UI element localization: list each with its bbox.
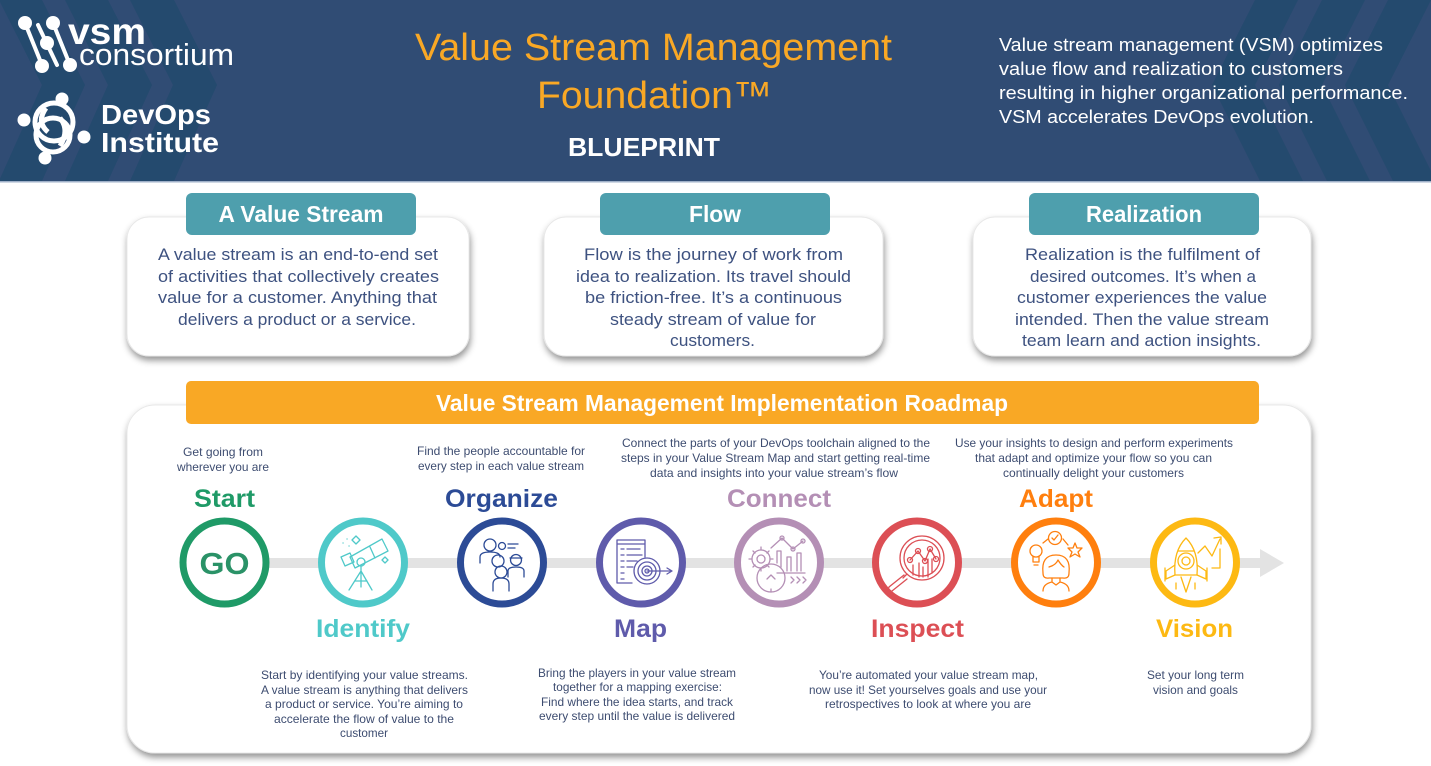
panel: realization: customer experiences the value xyxy=(1017,288,1267,307)
panel: flow: idea to realization. Its travel should xyxy=(576,267,851,286)
step: organize: Find the people accountable for xyxy=(417,445,585,458)
step: organize xyxy=(417,445,585,604)
step: identify: Identify xyxy=(316,615,410,643)
step: vision: vision and goals xyxy=(1153,684,1238,697)
panel: roadmap xyxy=(127,381,1311,753)
step: connect: data and insights into your value stream’s flow xyxy=(650,467,899,480)
step: organize: Organize xyxy=(445,485,558,513)
step: inspect: You’re automated your value stream map, xyxy=(819,669,1038,682)
logo: VSM Consortium: vsm xyxy=(68,11,146,52)
step: vision xyxy=(1147,521,1244,697)
step: vision: Set your long term xyxy=(1147,669,1244,682)
step: connect: Connect the parts of your DevOps toolchain aligned to the xyxy=(622,437,930,450)
step: inspect: now use it! Set yourselves goals and use your xyxy=(809,684,1047,697)
panel: realization: intended. Then the value stream xyxy=(1015,310,1269,329)
step: inspect: retrospectives to look at where you are xyxy=(825,698,1031,711)
panel: flow xyxy=(544,193,883,356)
step: map: Map xyxy=(614,615,667,643)
step: adapt: continually delight your customers xyxy=(1003,467,1184,480)
step: identify: a product or service. You’re aiming to xyxy=(265,698,463,711)
step: identify xyxy=(261,521,468,740)
panel: realization: team learn and action insights. xyxy=(1022,331,1261,350)
step: identify: Start by identifying your value streams. xyxy=(261,669,468,682)
header banner xyxy=(0,0,1431,182)
title xyxy=(415,27,892,117)
panel: flow: steady stream of value for xyxy=(610,310,817,329)
step: start: Get going from xyxy=(183,446,263,459)
panel: flow: customers. xyxy=(670,331,755,350)
icon: person with ideas xyxy=(1030,532,1082,591)
step: adapt: that adapt and optimize your flow so you can xyxy=(975,452,1212,465)
step: inspect: Inspect xyxy=(871,615,965,643)
icon: checklist and target xyxy=(617,540,672,584)
panel: realization: desired outcomes. It’s when a xyxy=(1030,267,1257,286)
panel: a value stream: delivers a product or a service. xyxy=(178,310,416,329)
step: start: wherever you are xyxy=(176,461,269,474)
step: connect xyxy=(621,437,930,604)
icon: rocket and growth chart xyxy=(1165,537,1221,592)
logo: DevOps Institute: Institute xyxy=(101,127,219,158)
step: vision: Vision xyxy=(1156,615,1233,643)
step: start: GO xyxy=(200,546,250,581)
panel: flow: Flow is the journey of work from xyxy=(584,245,843,264)
panel: flow: be friction-free. It’s a continuous xyxy=(585,288,842,307)
step: map xyxy=(538,521,736,723)
step: identify: A value stream is anything that delivers xyxy=(261,684,468,697)
logo: VSM Consortium: consortium xyxy=(79,37,234,72)
header description: Value stream management (VSM) optimizes xyxy=(999,34,1383,55)
logo: DevOps Institute: DevOps xyxy=(101,99,211,130)
roadmap heading xyxy=(186,381,1259,424)
step: adapt: Use your insights to design and perform experiments xyxy=(955,437,1233,450)
header description xyxy=(999,34,1408,127)
step: map: Find where the idea starts, and track xyxy=(541,696,733,709)
timeline arrow xyxy=(265,549,1284,577)
step: map: together for a mapping exercise: xyxy=(553,681,722,694)
panel: realization: Realization is the fulfilment of xyxy=(1025,245,1260,264)
title: Foundation™ xyxy=(537,75,772,117)
icon: magnifier with chart xyxy=(888,536,944,591)
panel: a value stream: A value stream is an end-to-end set xyxy=(158,245,438,264)
step: adapt: Adapt xyxy=(1019,485,1094,513)
icon: telescope xyxy=(341,536,388,590)
subtitle: BLUEPRINT xyxy=(568,132,720,162)
roadmap heading: Value Stream Management Implementation Roadmap xyxy=(436,390,1008,416)
step: connect: steps in your Value Stream Map and start getting real-time xyxy=(621,452,930,465)
step: start xyxy=(176,446,269,604)
step: connect: Connect xyxy=(727,485,832,513)
panel: a value stream xyxy=(127,193,469,356)
header description: value flow and realization to customers xyxy=(999,58,1343,79)
icon: team xyxy=(480,539,524,591)
step: map: Bring the players in your value stream xyxy=(538,667,736,680)
step: inspect xyxy=(809,521,1047,711)
panel: a value stream: of activities that collectively creates xyxy=(158,267,439,286)
panel: realization: Realization xyxy=(1086,201,1202,227)
step: identify: accelerate the flow of value to the xyxy=(274,713,454,726)
logo: VSM Consortium xyxy=(18,11,234,73)
step: identify: customer xyxy=(340,727,388,740)
panel: a value stream: value for a customer. Anything that xyxy=(158,288,437,307)
logo: DevOps Institute xyxy=(18,92,219,164)
header description: resulting in higher organizational performance. xyxy=(999,82,1408,103)
panel: flow: Flow xyxy=(689,201,741,227)
title: Value Stream Management xyxy=(415,27,892,69)
header description: VSM accelerates DevOps evolution. xyxy=(999,106,1314,127)
panel: realization xyxy=(973,193,1311,356)
icon: gear, clock and chart xyxy=(749,536,806,592)
step: map: every step until the value is delivered xyxy=(539,710,735,723)
step: start: Start xyxy=(194,485,256,513)
step: organize: every step in each value stream xyxy=(418,460,584,473)
panel: a value stream: A Value Stream xyxy=(218,201,384,227)
step: adapt xyxy=(955,437,1233,604)
